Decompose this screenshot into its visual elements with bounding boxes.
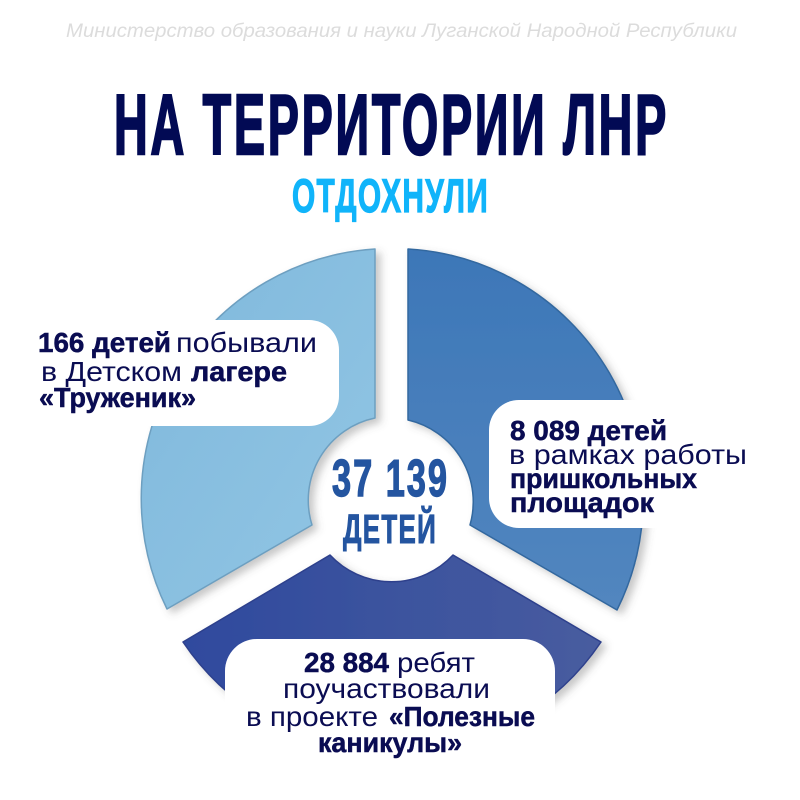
callout: camp: «Труженик»: [39, 382, 196, 413]
center total: 37 139: [332, 450, 449, 508]
callout: camp: в Детском: [41, 356, 182, 387]
callout: camp: побывали: [176, 327, 317, 358]
pie chart segment: school grounds: [408, 249, 643, 610]
callout: camp: 166 детей: [38, 327, 171, 358]
callout: useful holidays: [225, 639, 555, 779]
callout: useful holidays: 28 884: [304, 647, 389, 678]
center total: [332, 450, 449, 552]
callout: school grounds: в рамках работы: [509, 439, 747, 470]
callout: camp: лагере: [191, 356, 287, 387]
callout: school grounds: пришкольных: [510, 463, 697, 494]
callout: school grounds: площадок: [510, 487, 655, 518]
callout: useful holidays: в проекте: [246, 701, 378, 732]
subtitle: ОТДОХНУЛИ: [292, 169, 489, 222]
center total: ДЕТЕЙ: [343, 506, 437, 552]
ministry header: Министерство образования и науки Луганской Народной Республики: [66, 21, 737, 42]
callout: camp: [0, 320, 339, 426]
callout: useful holidays: поучаствовали: [283, 673, 490, 704]
pie chart segment: camp: [141, 249, 375, 609]
callout: useful holidays: каникулы»: [318, 727, 462, 758]
callout: school grounds: [489, 400, 800, 528]
callout: school grounds: 8 089 детей: [510, 415, 667, 446]
pie chart segment: useful holidays: [183, 555, 601, 753]
callout: useful holidays: ребят: [397, 647, 475, 678]
callout: useful holidays: «Полезные: [389, 701, 535, 732]
